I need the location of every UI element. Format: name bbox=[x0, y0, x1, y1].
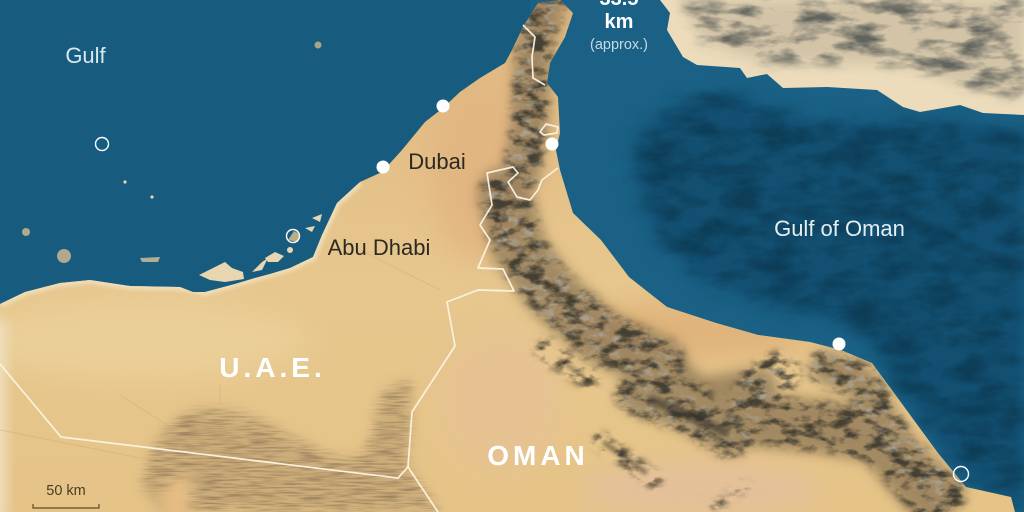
international borders bbox=[0, 25, 558, 512]
label: U.A.E.: U.A.E. bbox=[219, 352, 326, 383]
callout: strait width: km bbox=[605, 11, 633, 33]
desert dune field bbox=[143, 380, 440, 512]
callout: strait width bbox=[590, 0, 648, 53]
faint desert tracks bbox=[0, 250, 440, 465]
label: Dubai: Dubai bbox=[408, 149, 466, 174]
label: Abu Dhabi: Abu Dhabi bbox=[328, 235, 430, 260]
islands bbox=[22, 42, 322, 282]
scale bar: 50 km bbox=[33, 483, 99, 508]
land: Iran coast bbox=[660, 0, 1024, 115]
callout: strait width: (approx.) bbox=[590, 37, 648, 53]
label: Gulf: Gulf bbox=[65, 43, 107, 68]
scale bar: 50 km: 50 km bbox=[46, 483, 86, 499]
label: Gulf of Oman: Gulf of Oman bbox=[774, 216, 905, 241]
open circle markers bbox=[96, 138, 968, 482]
city markers bbox=[376, 100, 846, 350]
label: OMAN: OMAN bbox=[487, 440, 589, 471]
mountain shading bbox=[505, 0, 949, 507]
